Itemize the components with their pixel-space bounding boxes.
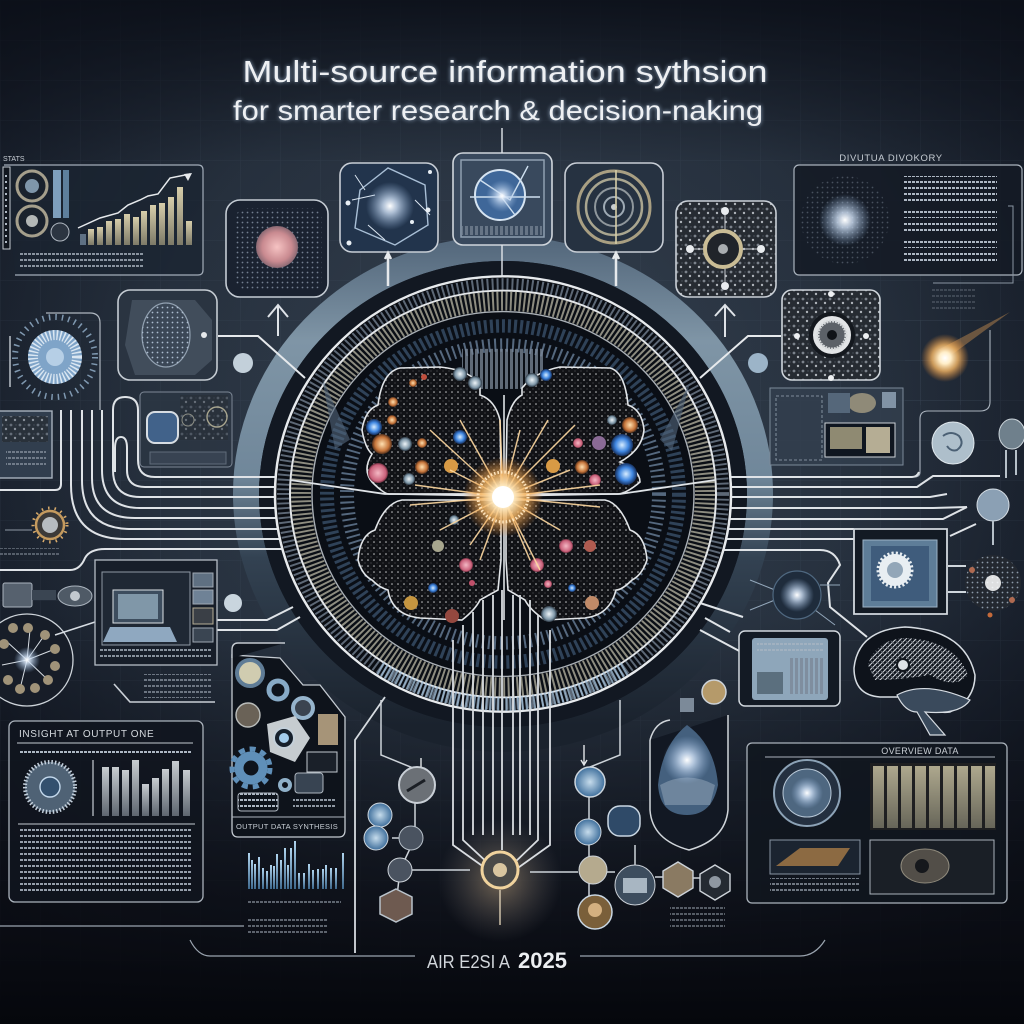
arrow: up right — [715, 305, 735, 337]
hub glow — [438, 818, 562, 942]
brain: lower left lobe — [358, 500, 501, 623]
panel: circuit brain — [782, 290, 880, 381]
outer arc band — [246, 249, 760, 739]
panel: tablet with data — [739, 631, 840, 706]
text block: chart notes — [247, 898, 341, 934]
node: central hub — [482, 852, 518, 925]
panel: radar with bars: OVERVIEW DATA — [881, 746, 959, 756]
connector lines: left bundle — [0, 397, 285, 570]
icon: right orb — [748, 353, 768, 373]
title: Multi-source information sythsion — [242, 54, 768, 89]
icon: left device and lens — [3, 583, 92, 607]
panel: pink sphere — [226, 200, 328, 297]
central circle — [275, 276, 731, 712]
panel: radar with bars — [747, 743, 1007, 903]
text: left small rows — [0, 530, 60, 558]
panel: brain scan — [118, 290, 217, 380]
panel: top-left trend chart: STATS — [3, 156, 25, 163]
icon: glass bulb — [977, 489, 1009, 545]
icon: sparkle cluster — [948, 555, 1021, 618]
panel: blue glowing orb — [453, 153, 552, 245]
note: small text callout — [114, 674, 215, 702]
connector: lower right curves — [700, 603, 743, 653]
icon: right head — [999, 419, 1024, 478]
arrow: up left — [268, 305, 288, 336]
icon: small burst — [224, 594, 242, 612]
panel: left radial cluster — [0, 614, 95, 706]
icon: orb with spokes — [750, 571, 840, 625]
panel: laptop — [95, 560, 217, 665]
vertical data lines — [453, 590, 550, 870]
panel: network orb — [340, 163, 438, 252]
chart: blue spikes — [248, 841, 344, 889]
panel: insight output — [9, 721, 203, 902]
panel: radial blue burst — [10, 313, 100, 410]
title — [233, 54, 768, 126]
footer frame line — [0, 697, 825, 956]
connector: upper right curve — [700, 336, 781, 378]
icon: left sun — [33, 508, 67, 542]
icon: right disc — [932, 422, 974, 464]
connector: lower left curves — [217, 607, 300, 630]
brain: upper left lobe — [362, 367, 501, 496]
connector: top vertical axis — [501, 128, 503, 380]
ring: bright lower arc — [380, 668, 626, 704]
central burst — [410, 420, 600, 570]
panel: noisy circuit top right — [676, 201, 776, 297]
arrow: up center right — [613, 253, 619, 286]
panel: top-left trend chart — [3, 156, 203, 275]
brain: upper right lobe — [506, 367, 644, 496]
title: for smarter research & decision-naking — [233, 95, 763, 126]
node tree: left — [364, 700, 470, 922]
node tree: right — [530, 700, 730, 930]
arrow: up center left — [385, 253, 391, 286]
icon: left orb — [233, 353, 253, 373]
panel: tablet circuit board — [140, 392, 232, 467]
panel: diversity summary — [794, 153, 1022, 283]
panel: diversity summary: DIVUTUA DIVOKORY — [839, 153, 943, 164]
panel: left square circuit — [0, 411, 52, 478]
panel: gears — [232, 643, 345, 837]
connector lines: right bundle — [712, 472, 1000, 637]
footer label: AIR E2SI A — [427, 952, 510, 972]
panel: gears: OUTPUT DATA SYNTHESIS — [236, 822, 338, 831]
panel: framed blue burst — [854, 529, 947, 614]
icon: side view brain — [854, 627, 975, 735]
brain: lower right lobe — [506, 500, 647, 622]
footer label: 2025 — [518, 948, 567, 973]
panel: beacon shield — [650, 680, 728, 850]
panel: right glowing flare — [905, 287, 1010, 477]
panel: insight output: INSIGHT AT OUTPUT ONE — [19, 729, 154, 740]
panel: right blueprint with monitor — [770, 388, 903, 465]
brain: horizontal rails — [290, 395, 715, 620]
connector: upper left curve — [218, 336, 305, 378]
panel: golden rings — [565, 163, 663, 252]
